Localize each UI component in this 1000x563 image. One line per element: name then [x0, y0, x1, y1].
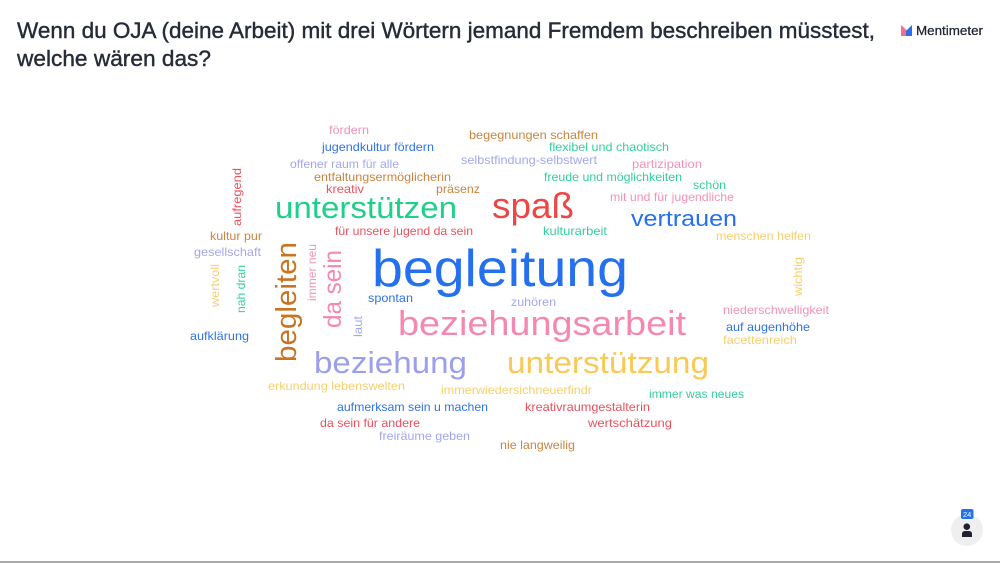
word: nah dran (vertical): nah dran	[234, 265, 248, 313]
word: freiräume geben: freiräume geben	[379, 429, 470, 443]
word: menschen helfen: menschen helfen	[716, 229, 811, 243]
word: begleiten (vertical): begleiten	[271, 242, 303, 362]
word: gesellschaft: gesellschaft	[194, 245, 262, 259]
participant counter	[951, 509, 983, 546]
word: immerwiedersichneuerfindr: immerwiedersichneuerfindr	[441, 383, 592, 397]
word: spontan: spontan	[368, 291, 413, 305]
word: beziehungsarbeit: beziehungsarbeit	[398, 305, 687, 343]
word: facettenreich: facettenreich	[723, 333, 797, 347]
participant counter: 24	[963, 510, 971, 519]
word: partizipation: partizipation	[632, 157, 702, 171]
word: für unsere jugend da sein: für unsere jugend da sein	[335, 224, 473, 238]
word: aufmerksam sein u machen: aufmerksam sein u machen	[337, 400, 488, 414]
word: entfaltungsermöglicherin: entfaltungsermöglicherin	[314, 170, 451, 184]
word: vertrauen: vertrauen	[631, 206, 737, 231]
word: begleitung: begleitung	[372, 240, 628, 298]
word: zuhören: zuhören	[511, 295, 556, 309]
title: Wenn du OJA (deine Arbeit) mit drei Wörtern jemand Fremdem beschreiben müsstest,	[17, 18, 875, 43]
word: unterstützung: unterstützung	[507, 345, 709, 380]
word: niederschwelligkeit: niederschwelligkeit	[723, 303, 830, 317]
word: selbstfindung-selbstwert: selbstfindung-selbstwert	[461, 153, 598, 167]
word: wertvoll (vertical): wertvoll	[208, 264, 222, 308]
word: begegnungen schaffen: begegnungen schaffen	[469, 128, 598, 142]
word: präsenz: präsenz	[436, 182, 480, 196]
word: nie langweilig: nie langweilig	[500, 438, 575, 452]
word: kreativ: kreativ	[326, 182, 364, 196]
word: kultur pur: kultur pur	[210, 229, 262, 243]
word: auf augenhöhe: auf augenhöhe	[726, 320, 810, 334]
word: kreativraumgestalterin: kreativraumgestalterin	[525, 400, 650, 414]
word: schön: schön	[693, 178, 726, 192]
word: offener raum für alle: offener raum für alle	[290, 157, 399, 171]
word: aufklärung: aufklärung	[190, 329, 249, 343]
word: laut (vertical): laut	[351, 315, 365, 337]
title: welche wären das?	[16, 46, 211, 71]
word: erkundung lebenswelten: erkundung lebenswelten	[268, 379, 405, 393]
word: wertschätzung: wertschätzung	[587, 416, 672, 430]
word: flexibel und chaotisch: flexibel und chaotisch	[549, 140, 669, 154]
logo: Mentimeter: Mentimeter	[916, 23, 984, 38]
word: unterstützen: unterstützen	[275, 190, 457, 225]
word: fördern: fördern	[329, 123, 369, 137]
word: jugendkultur fördern: jugendkultur fördern	[321, 140, 434, 154]
word: mit und für jugendliche: mit und für jugendliche	[610, 190, 734, 204]
word: kulturarbeit: kulturarbeit	[543, 224, 608, 238]
word: wichtig (vertical): wichtig	[791, 257, 805, 297]
word: spaß: spaß	[492, 185, 574, 226]
word: immer neu (vertical): immer neu	[305, 244, 319, 301]
word: beziehung: beziehung	[314, 345, 467, 380]
word cloud	[190, 123, 830, 452]
word: da sein für andere: da sein für andere	[320, 416, 420, 430]
word: freude und möglichkeiten: freude und möglichkeiten	[544, 170, 682, 184]
word: da sein (vertical): da sein	[319, 250, 347, 328]
word: immer was neues: immer was neues	[649, 387, 744, 401]
word: aufregend (vertical): aufregend	[230, 168, 244, 226]
title	[16, 18, 875, 71]
